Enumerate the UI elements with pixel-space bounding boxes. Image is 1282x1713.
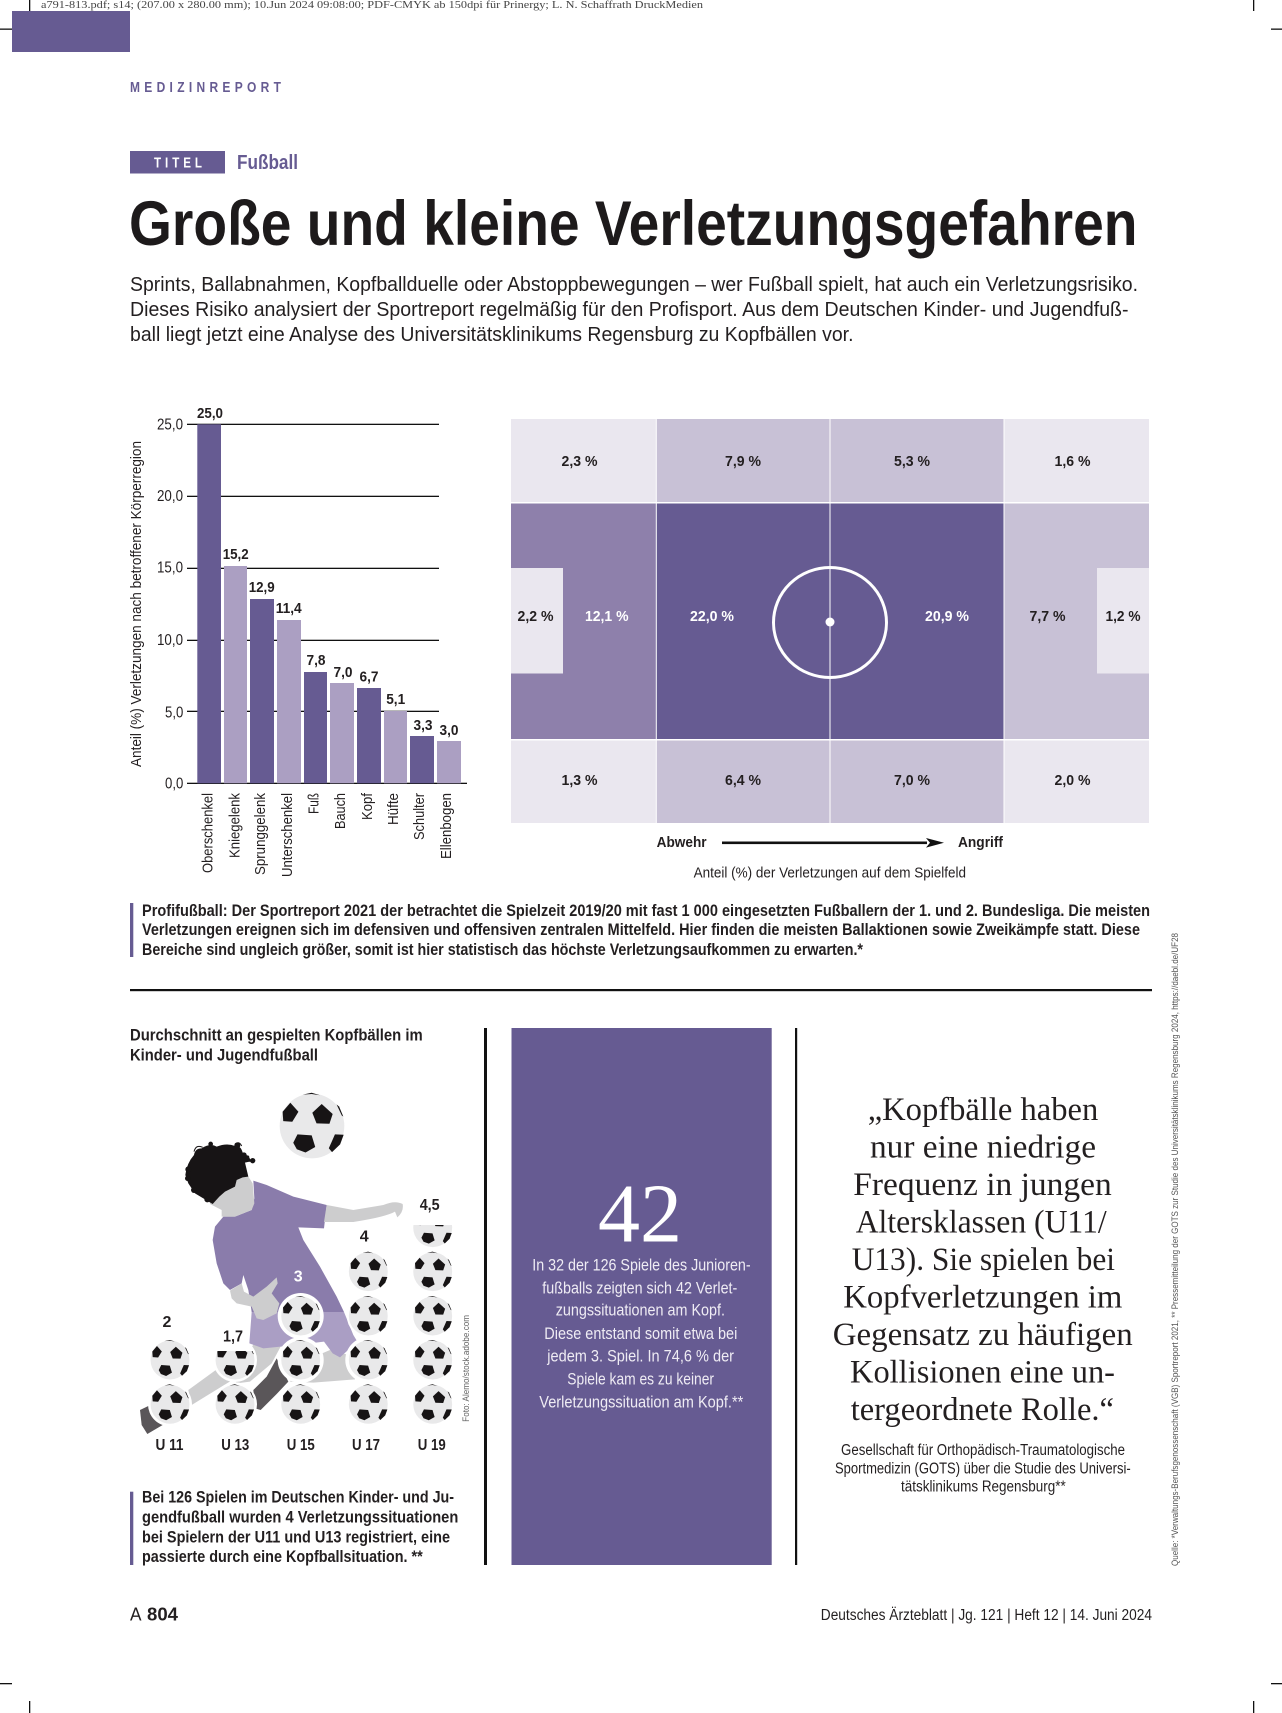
source note: Quelle: *Verwaltungs-Berufsgenossenschaft (VGB) Sportreport 2021, ** Pressemitteilung der GOTS zur Studie des Universitätsklinikums Regensburg 2024, https://daebl.de/UF28 [1170,933,1181,1566]
bar values: 6,7 [360,670,378,686]
pull quote: Altersklassen (U11/ [856,1205,1107,1241]
pitch percentages: 7,7 % [1030,609,1066,625]
callout: youth football: Bei 126 Spielen im Deutschen Kinder- und Ju- [142,1489,454,1507]
callout: youth football: passierte durch eine Kopfballsituation. ** [142,1548,423,1566]
ball chart values: 4,5 [420,1197,440,1214]
heading: header balls chart [130,1027,423,1065]
pitch percentages: 1,3 % [562,773,598,789]
lower arm and hand [230,1277,279,1320]
panel body text [532,1256,751,1412]
photo credit: Foto: Alemo/stock.adobe.com [461,1315,472,1422]
pitch caption: Anteil (%) der Verletzungen auf dem Spielfeld [694,865,966,882]
bar values: 3,3 [414,718,432,734]
pitch percentages: 7,0 % [894,773,930,789]
direction label: attack: Angriff [958,834,1004,851]
bar values [197,406,458,739]
y axis labels: 20,0 [157,488,183,505]
shirt [213,1181,344,1312]
ball chart values: 2 [162,1314,172,1331]
pull quote: Gegensatz zu häufigen [833,1317,1133,1353]
rubric tag: TITEL [154,154,202,171]
big ball [280,1093,344,1158]
arrow [722,838,944,848]
ball column U 17 [345,1252,391,1424]
category labels [200,792,455,877]
right leg [290,1350,355,1383]
category labels: Unterschenkel [279,793,296,877]
panel: key figure 42 [512,1028,772,1565]
pitch percentages: 2,3 % [562,454,598,470]
intro text: Dieses Risiko analysiert der Sportreport regelmäßig für den Profisport. Aus dem Deutschen Kinder- und Jugendfuß- [130,298,1128,321]
front thigh [233,1342,283,1383]
panel body text: Spiele kam es zu keiner [567,1369,714,1388]
page number [130,1604,179,1625]
direction label: defence: Abwehr [657,834,707,851]
pull quote: nur eine niedrige [870,1129,1096,1165]
age group labels [156,1437,446,1454]
intro text: ball liegt jetzt eine Analyse des Universitätsklinikums Regensburg zu Kopfbällen vor. [130,323,854,346]
pull quote [833,1092,1133,1428]
bars [197,424,461,783]
dark sock [253,1358,288,1410]
category labels: Oberschenkel [200,793,217,873]
y axis labels: 15,0 [157,560,183,577]
intro text: Sprints, Ballabnahmen, Kopfballduelle oder Abstoppbewegungen – wer Fußball spielt, hat auch ein Verletzungsrisiko. [130,273,1138,296]
shoe [140,1406,163,1434]
bar chart: injuries by body region [128,406,467,877]
pull quote: U13). Sie spielen bei [852,1242,1115,1278]
quote attribution [835,1442,1131,1496]
ball chart values: 3 [294,1269,303,1286]
big number: 42 [598,1168,682,1261]
age group labels: U 19 [418,1437,446,1454]
category labels: Kniegelenk [226,793,243,858]
age group labels: U 13 [221,1437,249,1454]
y axis labels: 25,0 [157,416,183,433]
category labels: Ellenbogen [438,793,455,859]
category labels: Bauch [332,793,349,829]
heading: header balls chart: Kinder- und Jugendfußball [130,1047,318,1065]
illustration: youth player heading the ball [140,1142,403,1434]
pull quote: tergeordnete Rolle.“ [851,1392,1114,1428]
rubric tag [130,151,225,174]
pitch percentages: 2,2 % [518,609,554,625]
pitch percentages: 7,9 % [725,454,761,470]
ball chart values [162,1197,440,1346]
ball chart values: 4 [360,1229,369,1246]
callout: professional football: Bereiche sind ungleich größer, somit ist hier statistisch das höchste Verletzungsaufkommen zu erwarten.* [142,941,863,959]
bar values: 5,1 [386,692,405,708]
centre circle [774,568,886,678]
panel body text: fußballs zeigten sich 42 Verlet- [542,1278,737,1297]
pitch percentages: 2,0 % [1054,773,1091,789]
pull quote: Kopfverletzungen im [843,1280,1123,1316]
journal reference: Deutsches Ärzteblatt | Jg. 121 | Heft 12 | 14. Juni 2024 [821,1607,1152,1624]
y axis labels: 0,0 [165,775,184,792]
pitch percentages [518,454,1141,789]
page number: 804 [147,1604,179,1625]
y axis labels: 10,0 [157,632,183,649]
bar values: 3,0 [440,723,458,739]
pitch percentages: 1,2 % [1106,609,1141,625]
callout: professional football: Profifußball: Der Sportreport 2021 der betrachtet die Spielzeit 2019/20 mit fast 1 000 eingesetzten Fußballern der 1. und 2. Bundesliga. Die meisten [142,902,1150,920]
bar values: 7,0 [334,665,352,681]
quote attribution: tätsklinikums Regensburg** [901,1479,1066,1496]
category labels: Kopf [359,792,376,820]
y axis labels: 5,0 [165,704,184,721]
purple corner tab [12,11,130,52]
bar values: 15,2 [223,547,249,563]
outstretched arm [324,1202,403,1222]
pull quote: Kollisionen eine un- [850,1355,1115,1391]
ball column U 11 [148,1340,192,1426]
age group labels: U 11 [156,1437,184,1454]
callout: youth football: gendfußball wurden 4 Verletzungssituationen [142,1509,458,1527]
title: Große und kleine Verletzungsgefahren [129,189,1138,259]
panel body text: zungssituationen am Kopf. [556,1301,725,1320]
callout: youth football: bei Spielern der U11 und U13 registriert, eine [142,1528,450,1546]
ball column U 15 [278,1293,324,1425]
callout: professional football [130,902,1150,959]
callout: youth football [130,1489,458,1566]
rubric name: Fußball [237,152,298,174]
ball column U 19 [413,1208,452,1424]
pitch percentages: 6,4 % [725,773,761,789]
age group labels: U 15 [287,1437,315,1454]
pitch zones [511,419,1149,823]
category labels: Fuß [306,793,323,814]
y axis title: Anteil (%) Verletzungen nach betroffener Körperregion [128,441,145,767]
pull quote: Frequenz in jungen [853,1167,1112,1203]
ball column U 13 [216,1343,257,1424]
category labels: Schulter [411,793,428,840]
pull quote: „Kopfbälle haben [868,1092,1098,1128]
bar values: 11,4 [276,601,302,617]
pitch heat map [511,419,1149,882]
bar values: 12,9 [249,580,275,596]
pitch percentages: 12,1 % [585,609,629,625]
quote attribution: Sportmedizin (GOTS) über die Studie des Universi- [835,1460,1131,1477]
heading: header balls chart: Durchschnitt an gespielten Kopfbällen im [130,1027,423,1045]
face and neck [209,1177,254,1217]
quote attribution: Gesellschaft für Orthopädisch-Traumatologische [841,1442,1125,1459]
shorts [249,1312,357,1357]
panel body text: jedem 3. Spiel. In 74,6 % der [546,1347,734,1366]
callout: professional football: Verletzungen ereignen sich im defensiven und offensiven zentralen Mittelfeld. Hier finden die meisten Ballaktionen sowie Zweikämpfe statt. Diese [142,921,1140,939]
back leg [188,1369,235,1405]
bar values: 7,8 [306,653,326,669]
y axis labels [157,416,184,792]
category labels: Sprunggelenk [252,793,269,875]
pitch percentages: 1,6 % [1054,454,1091,470]
bar values: 25,0 [197,406,223,422]
hair with curls [185,1142,255,1204]
panel body text: Diese entstand somit etwa bei [544,1324,737,1343]
ball chart values: 1,7 [223,1329,243,1346]
pitch percentages: 20,9 % [925,609,969,625]
panel body text: In 32 der 126 Spiele des Junioren- [532,1256,751,1275]
panel body text: Verletzungssituation am Kopf.** [539,1393,744,1412]
pitch percentages: 22,0 % [690,609,734,625]
section label: MEDIZINREPORT [130,79,282,95]
page number: A [130,1604,142,1625]
intro text [130,273,1138,346]
age group labels: U 17 [352,1437,380,1454]
pitch percentages: 5,3 % [894,454,930,470]
category labels: Hüfte [385,793,402,825]
